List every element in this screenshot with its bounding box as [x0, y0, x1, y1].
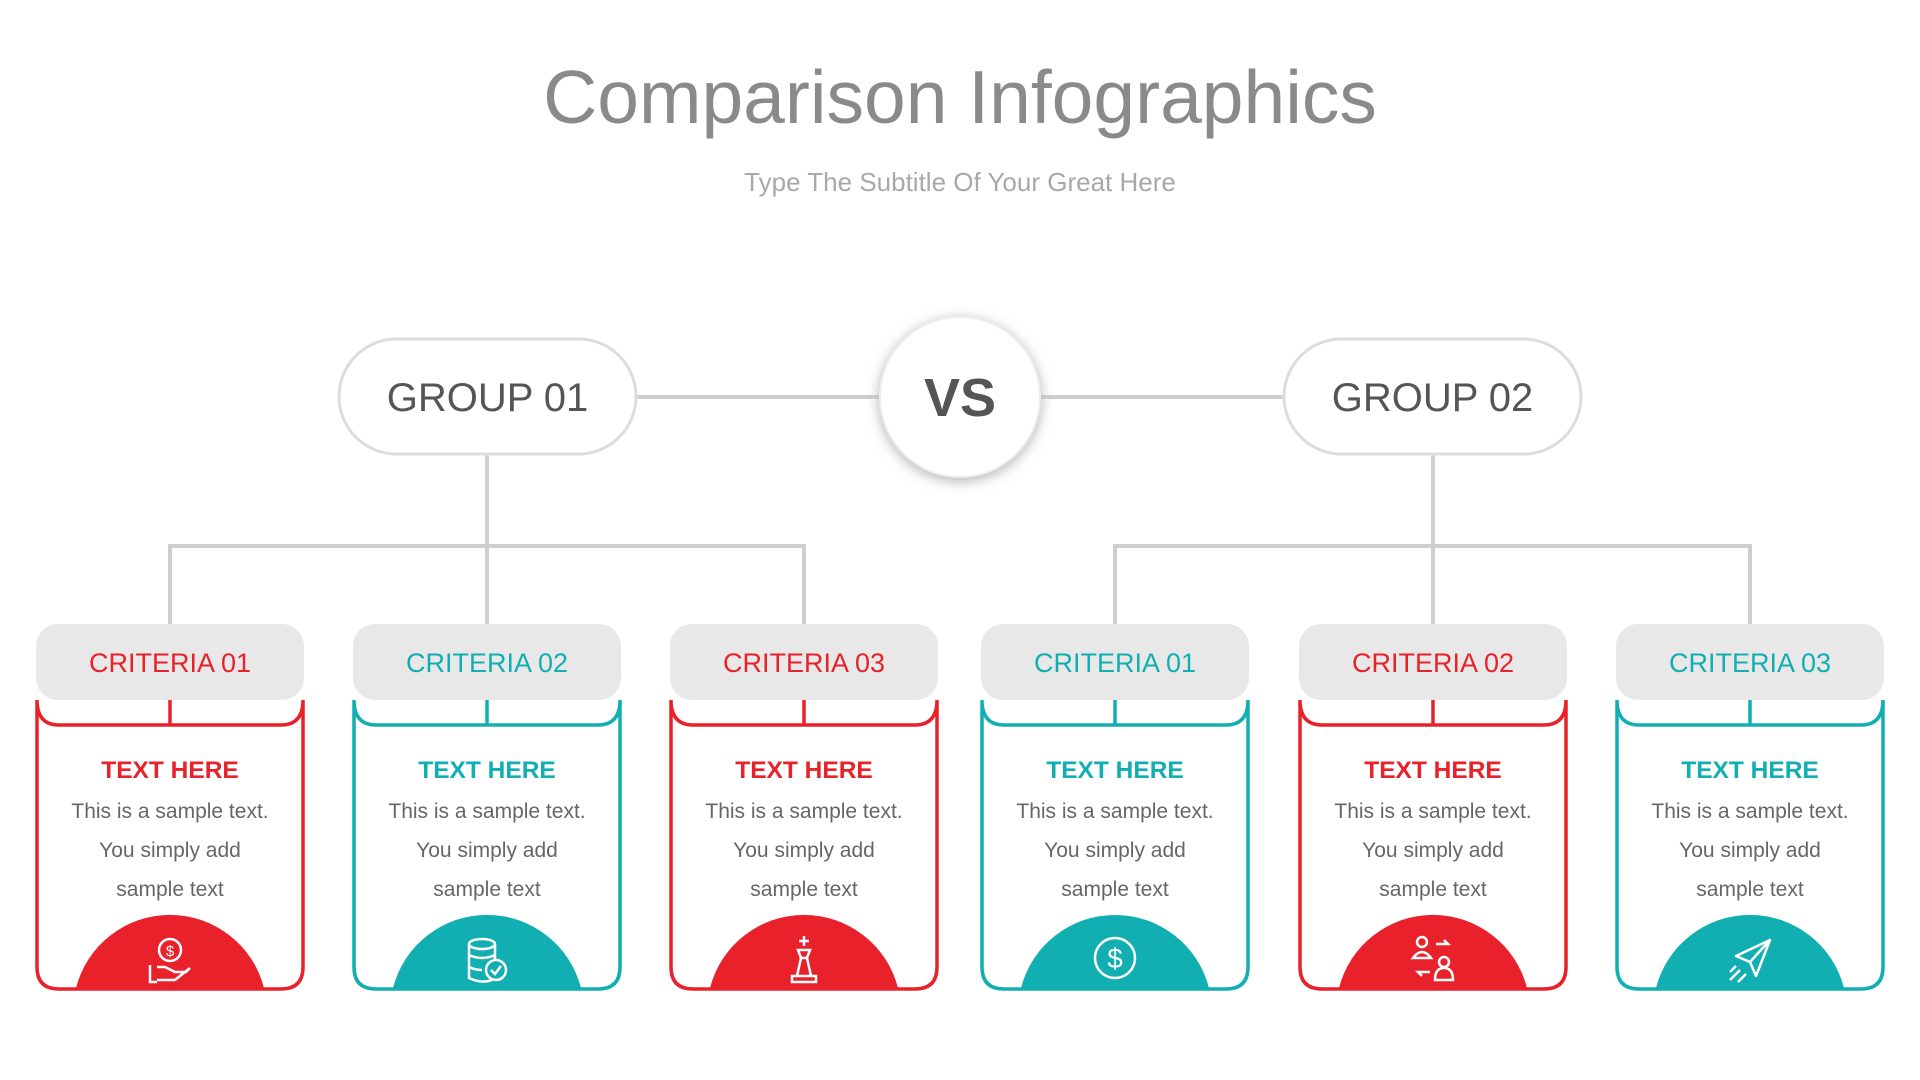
card: group1 criteria 02: sample text: [433, 878, 541, 901]
card: group1 criteria 01: [36, 624, 304, 989]
icon: chess piece: [792, 936, 816, 982]
icon: people swap: [1413, 937, 1453, 980]
card: group1 criteria 03: [670, 624, 938, 989]
card: group2 criteria 03: TEXT HERE: [1681, 757, 1819, 784]
group 01 pill: GROUP 01: [387, 376, 588, 420]
card: group2 criteria 02: sample text: [1379, 878, 1487, 901]
card: group1 criteria 01: sample text: [116, 878, 224, 901]
card: group1 criteria 02: TEXT HERE: [418, 757, 556, 784]
card: group1 criteria 02: [353, 624, 621, 989]
icon: money hand: $: [166, 943, 175, 960]
card: group2 criteria 01: You simply add: [1044, 839, 1186, 862]
card: group2 criteria 03: You simply add: [1679, 839, 1821, 862]
card: group1 criteria 01: You simply add: [99, 839, 241, 862]
icon: dollar coin: $: [1107, 943, 1123, 974]
vs circle: VS: [924, 368, 996, 428]
card: group2 criteria 01: CRITERIA 01: [1034, 648, 1196, 678]
card: group2 criteria 02: This is a sample text.: [1334, 800, 1532, 823]
card: group2 criteria 02: CRITERIA 02: [1352, 648, 1514, 678]
card: group1 criteria 01: TEXT HERE: [101, 757, 239, 784]
icon: database check: [469, 939, 506, 982]
card: group2 criteria 01: This is a sample text.: [1016, 800, 1214, 823]
icon: dollar coin: [1095, 938, 1135, 978]
card: group2 criteria 03: This is a sample text.: [1651, 800, 1849, 823]
card: group1 criteria 03: This is a sample text.: [705, 800, 903, 823]
card: group1 criteria 02: This is a sample text.: [388, 800, 586, 823]
card: group1 criteria 02: You simply add: [416, 839, 558, 862]
card: group2 criteria 01: TEXT HERE: [1046, 757, 1184, 784]
icon: money hand: [150, 939, 190, 982]
card: group2 criteria 03: sample text: [1696, 878, 1804, 901]
group 01 pill: [339, 339, 636, 454]
card: group1 criteria 02: CRITERIA 02: [406, 648, 568, 678]
title: Comparison Infographics: [543, 55, 1377, 139]
card: group2 criteria 03: CRITERIA 03: [1669, 648, 1831, 678]
connector lines: [170, 397, 1750, 624]
card: group2 criteria 03: [1616, 624, 1884, 989]
card: group2 criteria 02: You simply add: [1362, 839, 1504, 862]
card: group2 criteria 02: TEXT HERE: [1364, 757, 1502, 784]
card: group1 criteria 01: This is a sample text.: [71, 800, 269, 823]
card: group2 criteria 02: [1299, 624, 1567, 989]
card: group1 criteria 03: You simply add: [733, 839, 875, 862]
group 02 pill: [1284, 339, 1581, 454]
card: group1 criteria 01: CRITERIA 01: [89, 648, 251, 678]
subtitle: Type The Subtitle Of Your Great Here: [744, 167, 1176, 197]
card: group1 criteria 03: sample text: [750, 878, 858, 901]
card: group1 criteria 03: TEXT HERE: [735, 757, 873, 784]
card: group2 criteria 01: sample text: [1061, 878, 1169, 901]
card: group1 criteria 03: CRITERIA 03: [723, 648, 885, 678]
card: group2 criteria 01: [981, 624, 1249, 989]
icon: paper plane: [1730, 940, 1770, 982]
vs circle: [878, 317, 1042, 482]
group 02 pill: GROUP 02: [1332, 376, 1533, 420]
